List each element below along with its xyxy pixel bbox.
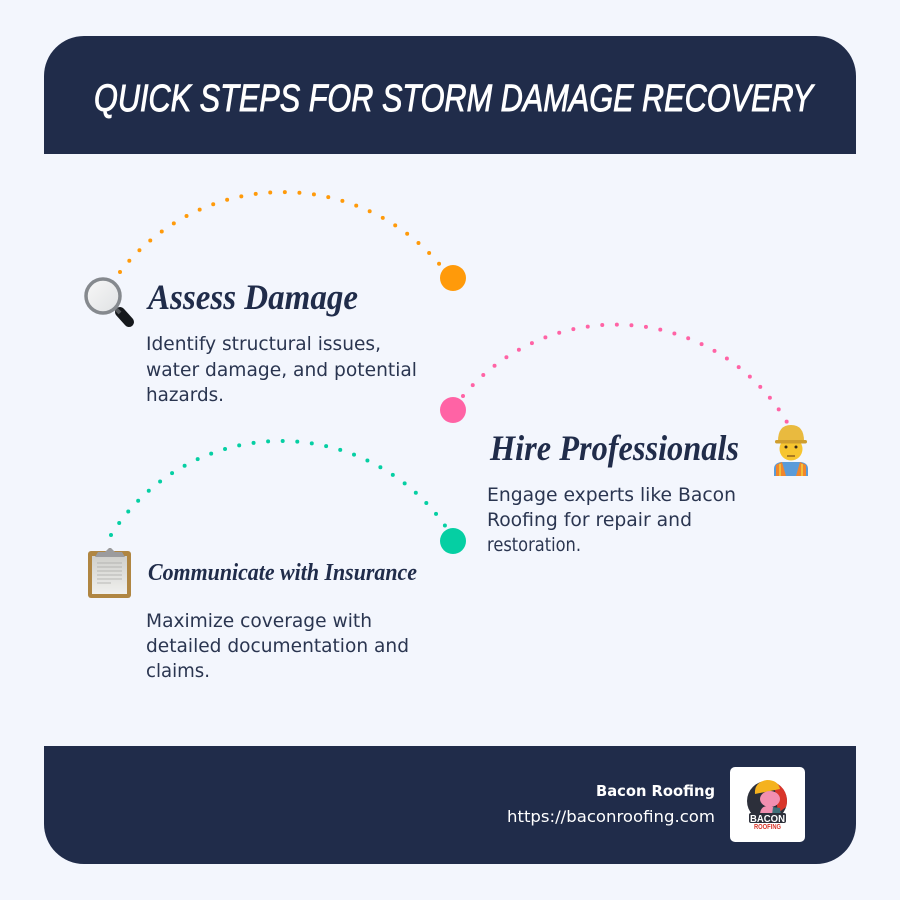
website url: https://baconroofing.com (507, 807, 715, 826)
header banner (44, 36, 856, 154)
icon: magnifying glass (86, 279, 129, 322)
heading: assess damage: Assess Damage (146, 277, 358, 317)
description: hire professionals: restoration. (487, 534, 581, 556)
description: communicate with insurance: detailed documentation and (146, 635, 409, 657)
step 3: communicate with insurance (88, 441, 466, 682)
logo (730, 767, 805, 842)
description: hire professionals: Engage experts like Bacon (487, 484, 736, 506)
description: assess damage: Identify structural issues, (146, 333, 381, 355)
description: assess damage: hazards. (146, 384, 224, 406)
icon: construction worker (774, 425, 808, 476)
brand name: Bacon Roofing (596, 782, 715, 800)
logo: ROOFING (754, 824, 781, 831)
description: communicate with insurance: claims. (146, 660, 210, 682)
description: assess damage: water damage, and potential (146, 359, 417, 381)
footer banner (44, 746, 856, 864)
pink dotted arc (463, 325, 788, 424)
heading: communicate with insurance: Communicate with Insurance (148, 560, 417, 586)
description: communicate with insurance: Maximize coverage with (146, 610, 372, 632)
green dotted arc (111, 441, 446, 535)
logo: BACON (750, 814, 785, 825)
green dot (440, 528, 466, 554)
orange dot (440, 265, 466, 291)
step 1: assess damage (86, 192, 466, 406)
description: hire professionals: Roofing for repair and (487, 509, 692, 531)
step 2: hire professionals (440, 325, 808, 556)
heading: hire professionals: Hire Professionals (489, 428, 739, 468)
icon: clipboard (88, 548, 131, 598)
pink dot (440, 397, 466, 423)
orange dotted arc (120, 192, 441, 272)
